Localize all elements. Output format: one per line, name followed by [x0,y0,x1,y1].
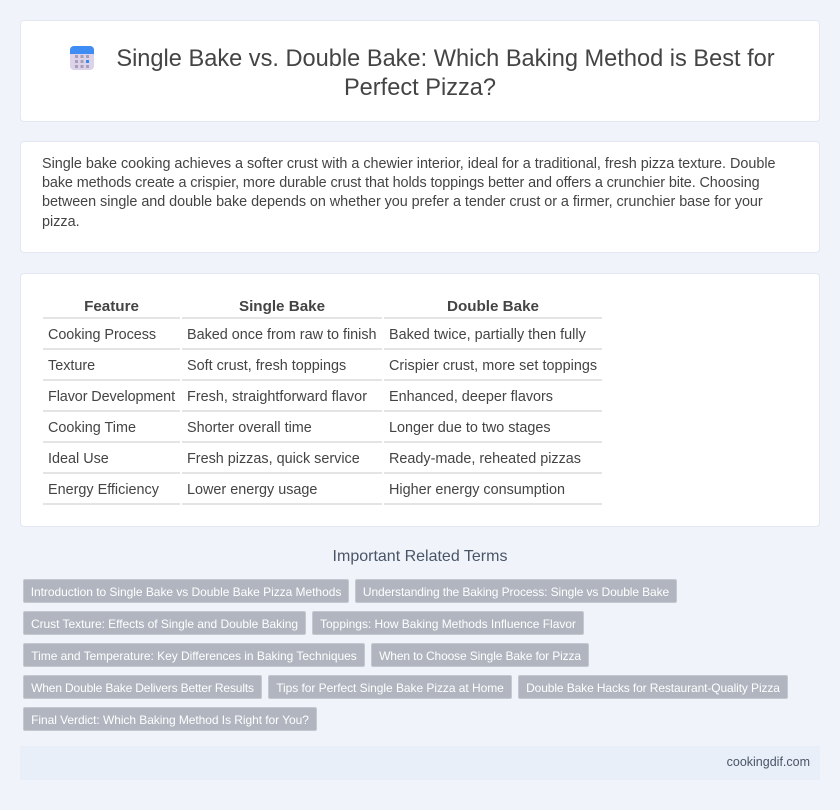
row: Energy Efficiency: Lower energy usage [187,482,317,498]
row: Energy Efficiency: Energy Efficiency [48,482,159,498]
header: Feature: Feature [84,298,139,315]
tag list: related terms: Toppings: How Baking Methods Influence Flavor [320,617,576,631]
heading: Important Related Terms: Important Related Terms [333,548,507,565]
footer bar [20,746,820,780]
panel: introduction [20,141,820,253]
tag list: related terms [23,579,788,731]
row: Energy Efficiency: Higher energy consumption [389,482,565,498]
tag list: related terms: Double Bake Hacks for Restaurant-Quality Pizza [526,681,780,695]
row: Flavor Development [48,389,553,405]
row: Cooking Time [48,420,551,436]
panel: title card [20,20,820,122]
tag list: related terms: Introduction to Single Bake vs Double Bake Pizza Methods [31,585,341,599]
row: Ideal Use [48,451,581,467]
row: Cooking Process: Baked once from raw to finish [187,327,377,343]
text block: introduction: pizza. [42,214,80,230]
tag list: related terms: When to Choose Single Bake for Pizza [379,649,581,663]
panel: comparison table [20,273,820,527]
row: Flavor Development: Fresh, straightforward flavor [187,389,367,405]
row: Ideal Use: Ideal Use [48,451,109,467]
row: Ideal Use: Ready-made, reheated pizzas [389,451,581,467]
row: Ideal Use: Fresh pizzas, quick service [187,451,360,467]
icon: calendar [70,46,94,70]
footer source: cookingdif.com [727,755,810,769]
row: Cooking Process [48,327,586,343]
row: Cooking Process: Cooking Process [48,327,156,343]
title: Single Bake vs. Double Bake: Which Baking Method is Best for [116,46,775,72]
row: Flavor Development: Flavor Development [48,389,175,405]
text block: introduction: between single and double bake depends on whether you prefer a tender crust or a firmer, crunchier base for your [42,194,763,210]
tag list: related terms: Tips for Perfect Single Bake Pizza at Home [276,681,504,695]
tag list: related terms: When Double Bake Delivers Better Results [31,681,254,695]
row: Cooking Process: Baked twice, partially then fully [389,327,586,343]
row: Texture: Crispier crust, more set toppings [389,358,597,374]
tag list: related terms: Crust Texture: Effects of Single and Double Baking [31,617,298,631]
table: comparison [43,298,602,505]
row: Cooking Time: Longer due to two stages [389,420,551,436]
tag list: related terms: Understanding the Baking Process: Single vs Double Bake [363,585,669,599]
header: Single Bake: Single Bake [239,298,325,315]
row: Texture: Texture [48,358,95,374]
row: Texture [48,358,597,374]
text block: introduction [42,156,776,230]
title: Perfect Pizza? [344,75,496,101]
row: Flavor Development: Enhanced, deeper flavors [389,389,553,405]
text block: introduction: Single bake cooking achieves a softer crust with a chewier interior, ideal for a traditional, fresh pizza texture. Double [42,156,776,172]
header: Double Bake: Double Bake [447,298,539,315]
tag list: related terms: Time and Temperature: Key Differences in Baking Techniques [31,649,357,663]
tag list: related terms: Final Verdict: Which Baking Method Is Right for You? [31,713,309,727]
row: Cooking Time: Shorter overall time [187,420,312,436]
row: Cooking Time: Cooking Time [48,420,136,436]
title [116,46,775,101]
row: Texture: Soft crust, fresh toppings [187,358,346,374]
text block: introduction: bake methods create a crispier, more durable crust that holds toppings better and offers a crunchier bite. Choosing [42,175,760,191]
row: Energy Efficiency [48,482,565,498]
